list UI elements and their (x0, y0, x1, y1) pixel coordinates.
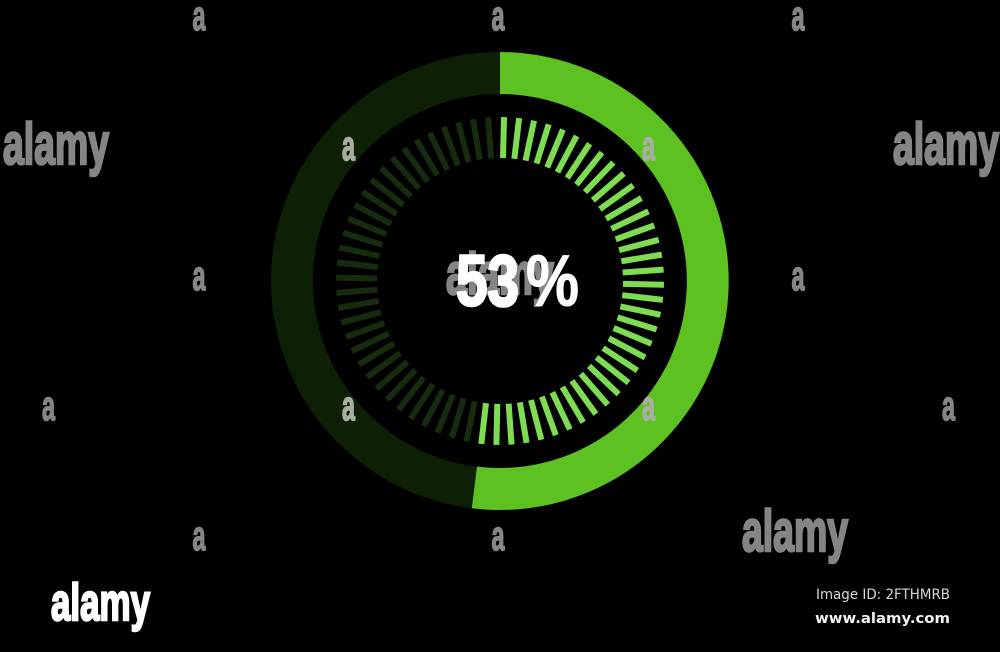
alamy logo: alamy (51, 574, 150, 632)
small repeating watermarks: a (42, 382, 55, 429)
small repeating watermarks: a (492, 512, 505, 559)
website url: www.alamy.com (815, 611, 950, 627)
unlit ticks (336, 117, 494, 442)
large watermark: centre: alamy (446, 242, 554, 307)
small repeating watermarks: a (942, 382, 955, 429)
percentage value: % (526, 242, 579, 322)
percentage value: 53 (456, 242, 519, 322)
lit ticks (478, 117, 664, 445)
inner radial tick gauge (336, 117, 664, 445)
small repeating watermarks: a (642, 122, 655, 169)
small repeating watermarks: a (792, 252, 805, 299)
small repeating watermarks: a (342, 382, 355, 429)
percentage value (456, 242, 579, 322)
large watermark: lower right: alamy (742, 499, 848, 564)
image id label: Image ID: 2FTHMRB (816, 587, 950, 603)
small repeating watermarks: a (342, 122, 355, 169)
small repeating watermarks: a (192, 512, 206, 559)
large watermark: left: alamy (3, 112, 109, 177)
ring progress arc (53%) (472, 52, 729, 510)
small repeating watermarks (42, 0, 955, 559)
small repeating watermarks: a (192, 252, 206, 299)
small repeating watermarks: a (642, 382, 655, 429)
donut chart: outer progress ring (292, 52, 729, 510)
ring track (remaining share) (292, 73, 708, 489)
